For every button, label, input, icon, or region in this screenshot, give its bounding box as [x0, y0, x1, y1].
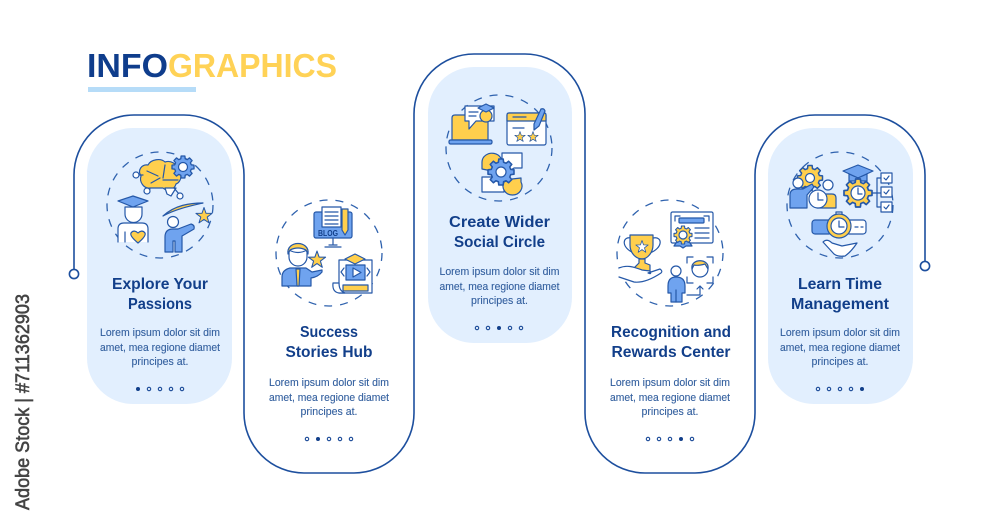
heading [112, 276, 208, 313]
heading [791, 276, 889, 313]
icon: brain, student and star [118, 156, 212, 252]
text block: amet, mea regione diamet [100, 342, 220, 354]
title: GRAPHICS [168, 47, 337, 84]
icon: laptop, browser and chat gear [449, 104, 546, 195]
text block: principes at. [642, 406, 698, 418]
text block: amet, mea regione diamet [440, 281, 560, 293]
panel: learn time management [768, 128, 913, 404]
panel: recognition and rewards center [610, 200, 731, 441]
text block: Lorem ipsum dolor sit dim [610, 377, 730, 389]
text block: Lorem ipsum dolor sit dim [269, 377, 389, 389]
text block: principes at. [471, 295, 528, 307]
pagination dots [475, 326, 523, 330]
text block: amet, mea regione diamet [780, 342, 900, 354]
panel: success stories hub [269, 200, 389, 441]
icon: trophy, certificate and person [619, 212, 713, 302]
heading: Recognition and [611, 324, 731, 341]
heading: Explore Your [112, 276, 208, 293]
text block: Lorem ipsum dolor sit dim [100, 327, 220, 339]
heading [611, 324, 731, 361]
pagination dots [646, 437, 694, 441]
text block [780, 327, 900, 368]
icon: blog, presenter and video [282, 207, 372, 293]
text block [269, 377, 389, 418]
heading [286, 324, 372, 361]
heading: Stories Hub [286, 344, 372, 361]
panel: create wider social circle [428, 67, 572, 343]
heading: Management [791, 296, 889, 313]
text block: principes at. [812, 356, 868, 368]
pagination dots [816, 387, 864, 391]
stock credit: Adobe Stock | #711362903 [13, 294, 34, 510]
pagination dots [136, 387, 184, 391]
heading: Success [300, 324, 358, 341]
text block: Lorem ipsum dolor sit dim [440, 266, 560, 278]
text block: Lorem ipsum dolor sit dim [780, 327, 900, 339]
connecting outline [69, 54, 930, 473]
text block [100, 327, 220, 368]
heading: Rewards Center [612, 344, 730, 361]
text block: principes at. [132, 356, 188, 368]
heading: Learn Time [798, 276, 882, 293]
heading: Passions [128, 296, 192, 313]
icon: blog, presenter and video: BLOG [318, 229, 338, 238]
title: INFO [87, 47, 168, 84]
heading: Create Wider [449, 214, 550, 231]
heading: Social Circle [454, 234, 545, 251]
text block: amet, mea regione diamet [610, 392, 730, 404]
text block [440, 266, 560, 307]
title [87, 47, 337, 92]
panel: explore your passions [87, 128, 232, 404]
heading [449, 214, 550, 251]
pagination dots [305, 437, 353, 441]
text block: amet, mea regione diamet [269, 392, 389, 404]
text block [610, 377, 730, 418]
text block: principes at. [300, 406, 358, 418]
icon: team, clock, checklist and watch [790, 165, 892, 256]
